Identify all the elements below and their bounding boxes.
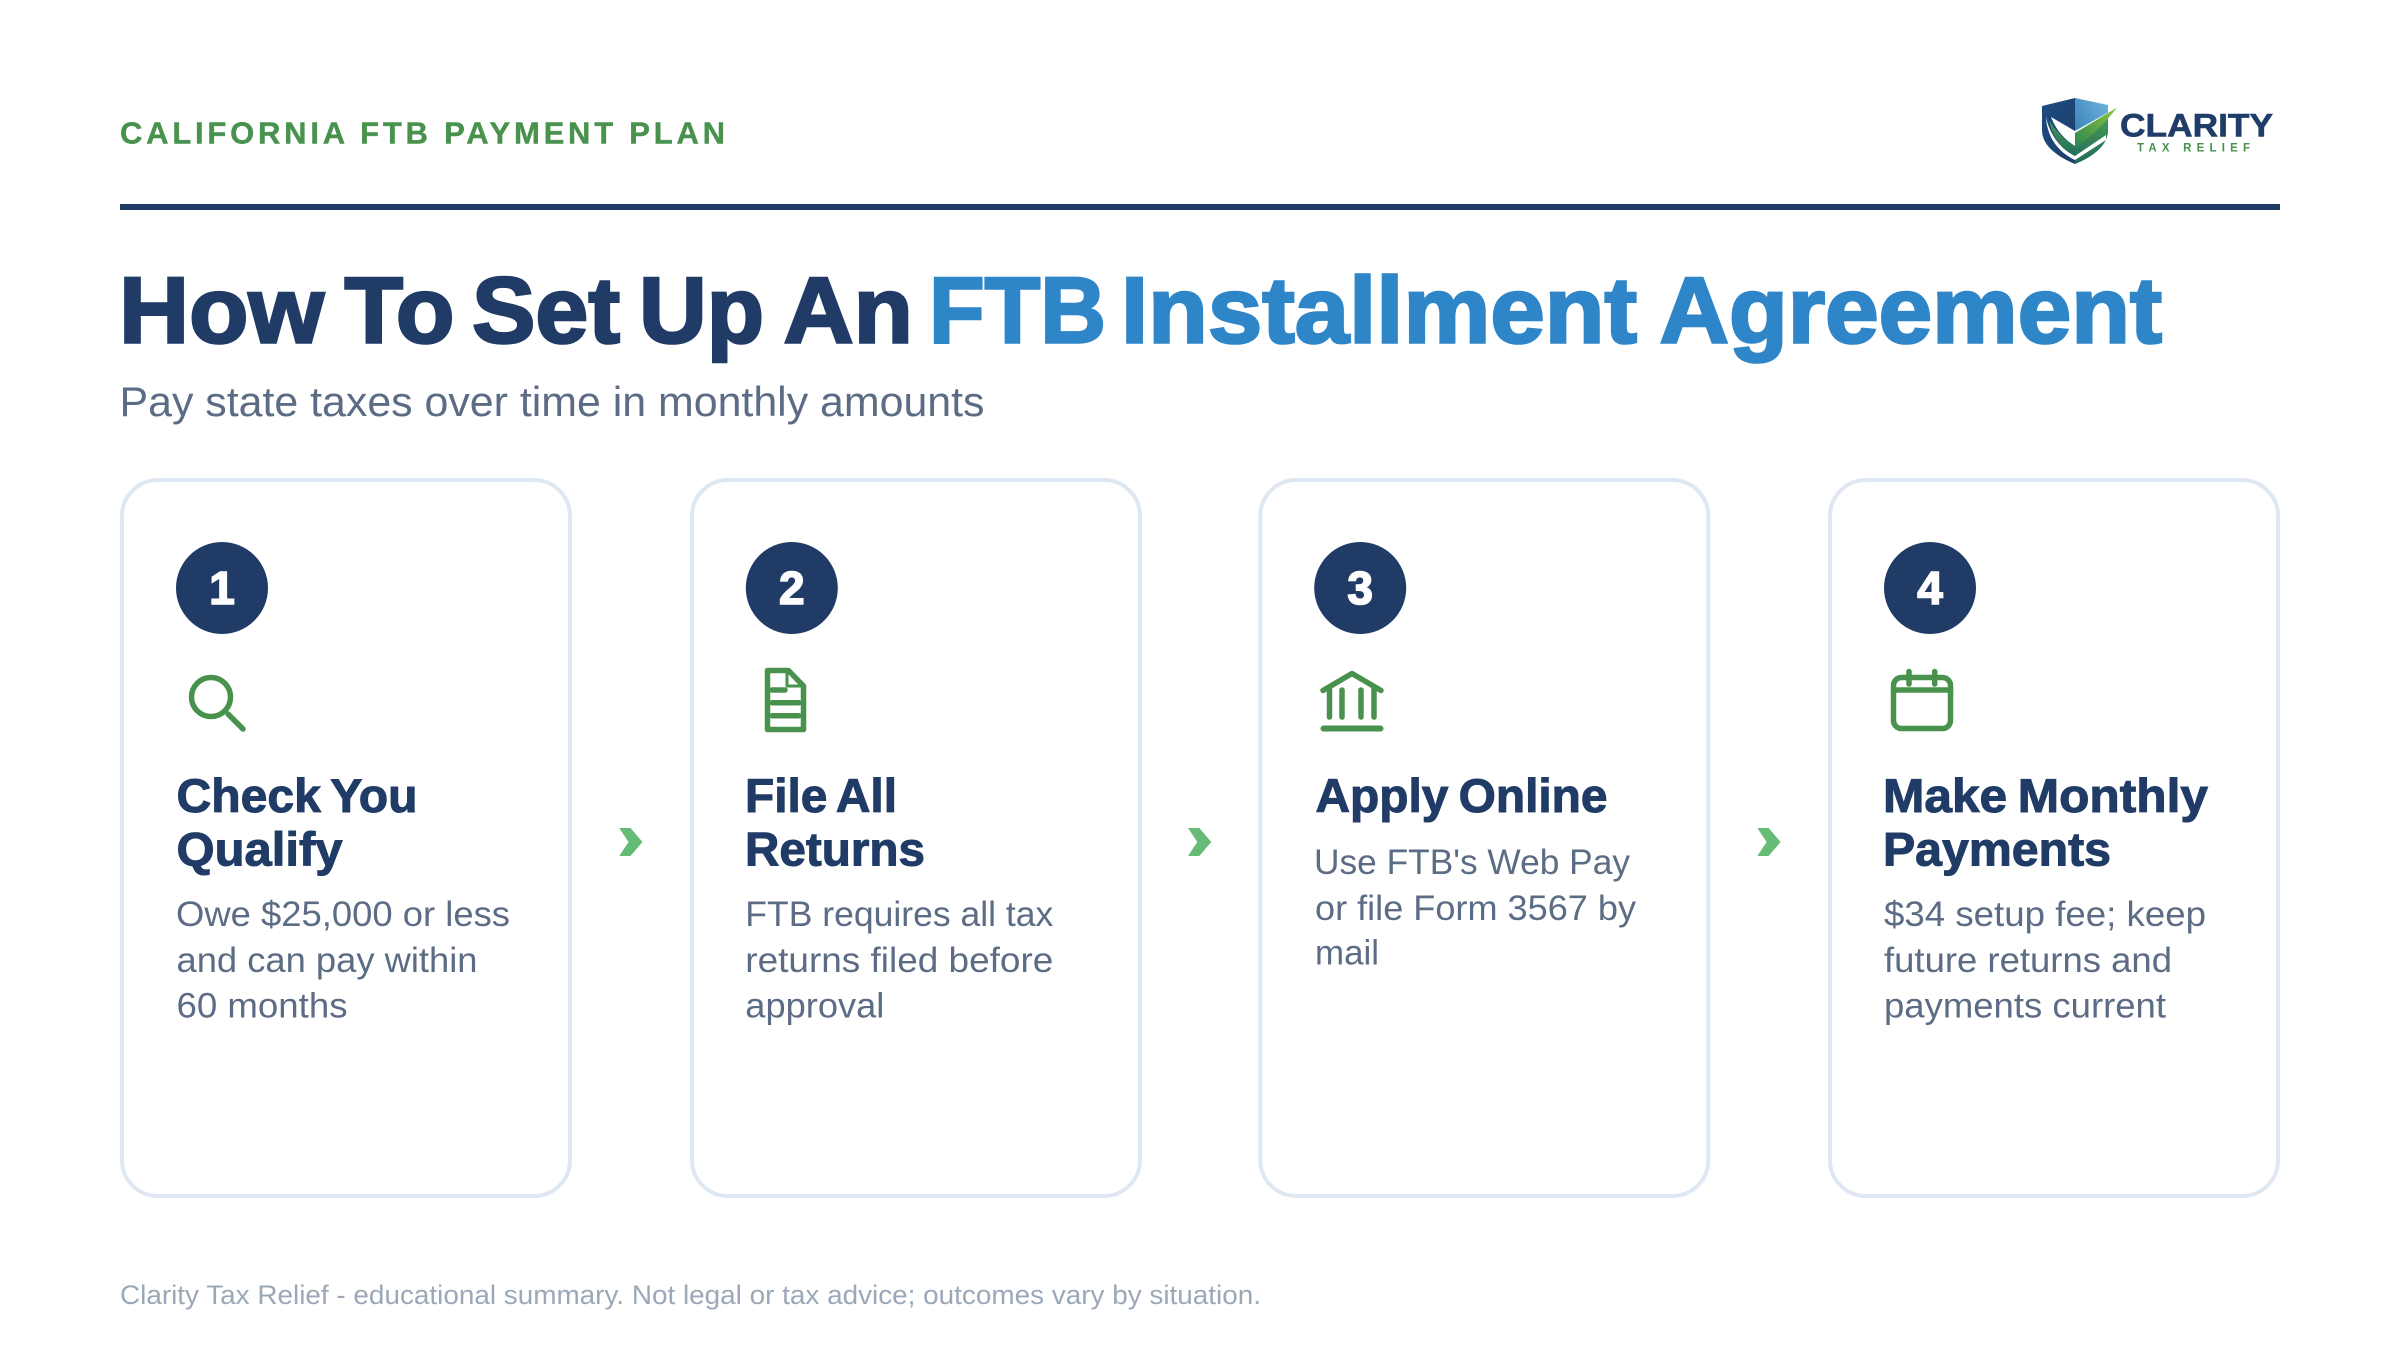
step 3 heading: Apply Online [1316,769,1608,822]
title navy part: How [119,258,325,363]
eyebrow heading: CALIFORNIA FTB PAYMENT PLAN [120,116,725,150]
step number 1: 1 [209,562,235,614]
step 4 heading: Make Monthly [1883,769,2208,822]
card outline [1260,480,1708,1196]
step 3 description: or file Form 3567 by [1315,888,1636,928]
step 2 description: returns filed before [745,940,1053,980]
step 1 description: Owe $25,000 or less [176,894,510,934]
step 3 description: Use FTB's Web Pay [1314,842,1630,882]
step number 2: 2 [779,562,805,614]
icon: document [768,670,804,730]
step 1 heading [176,769,418,876]
step number 1 [176,542,268,634]
panel: step 1 check you qualify [122,480,570,1196]
panel: step 4 make monthly payments [1830,480,2278,1196]
footer disclaimer: Clarity Tax Relief - educational summary. Not legal or tax advice; outcomes vary by situation. [120,1280,1261,1310]
card outline [122,480,570,1196]
logo wordmark: CLARITY [2120,108,2273,144]
title navy part: Up [639,258,764,363]
title blue part: FTB [929,258,1106,363]
title [119,258,2162,363]
step 4 heading [1883,769,2208,876]
step 1 description: 60 months [176,986,348,1026]
step number 4 [1884,542,1976,634]
step 4 description: future returns and [1884,940,2172,980]
step number 2 [746,542,838,634]
step 2 description: FTB requires all tax [745,894,1054,934]
step number 3 [1314,542,1406,634]
header rule [120,204,2280,210]
title navy part [119,258,913,363]
step 4 heading: Payments [1883,822,2111,876]
icon: calendar [1894,672,1950,728]
title navy part: To [344,258,454,363]
icon: bank building [1323,674,1381,728]
step number 3: 3 [1347,562,1373,614]
step 4 description: $34 setup fee; keep [1884,894,2206,934]
title blue part: Installment [1121,258,1637,363]
subtitle: Pay state taxes over time in monthly amounts [120,378,984,425]
panel: step 3 apply online [1260,480,1708,1196]
title navy part: An [784,258,913,363]
icon: magnifying glass [192,678,243,729]
step 4 description: payments current [1884,986,2166,1026]
step 3 description [1314,842,1636,972]
step 1 description: and can pay within [176,940,478,980]
card outline [692,480,1140,1196]
arrow 1 [619,828,642,856]
step number 4: 4 [1917,562,1943,614]
step 2 heading: File All [745,769,897,822]
title blue part [929,258,2162,363]
step 3 description: mail [1315,932,1379,972]
step 2 heading [745,769,925,876]
arrow 2 [1188,828,1211,856]
title blue part: Agreement [1660,258,2162,363]
card outline [1830,480,2278,1196]
step 4 description [1884,894,2206,1026]
step 1 description [176,894,510,1026]
step 2 description [745,894,1054,1026]
arrow 3 [1757,828,1781,856]
step 1 heading: Check You [176,769,418,822]
logo shield [2042,98,2117,164]
step 2 heading: Returns [745,822,925,876]
step 1 heading: Qualify [176,822,342,876]
step 2 description: approval [745,986,884,1026]
title navy part: Set [472,258,620,363]
logo: Clarity Tax Relief [2042,98,2273,164]
logo tagline: TAX RELIEF [2137,143,2250,155]
panel: step 2 file all returns [692,480,1140,1196]
